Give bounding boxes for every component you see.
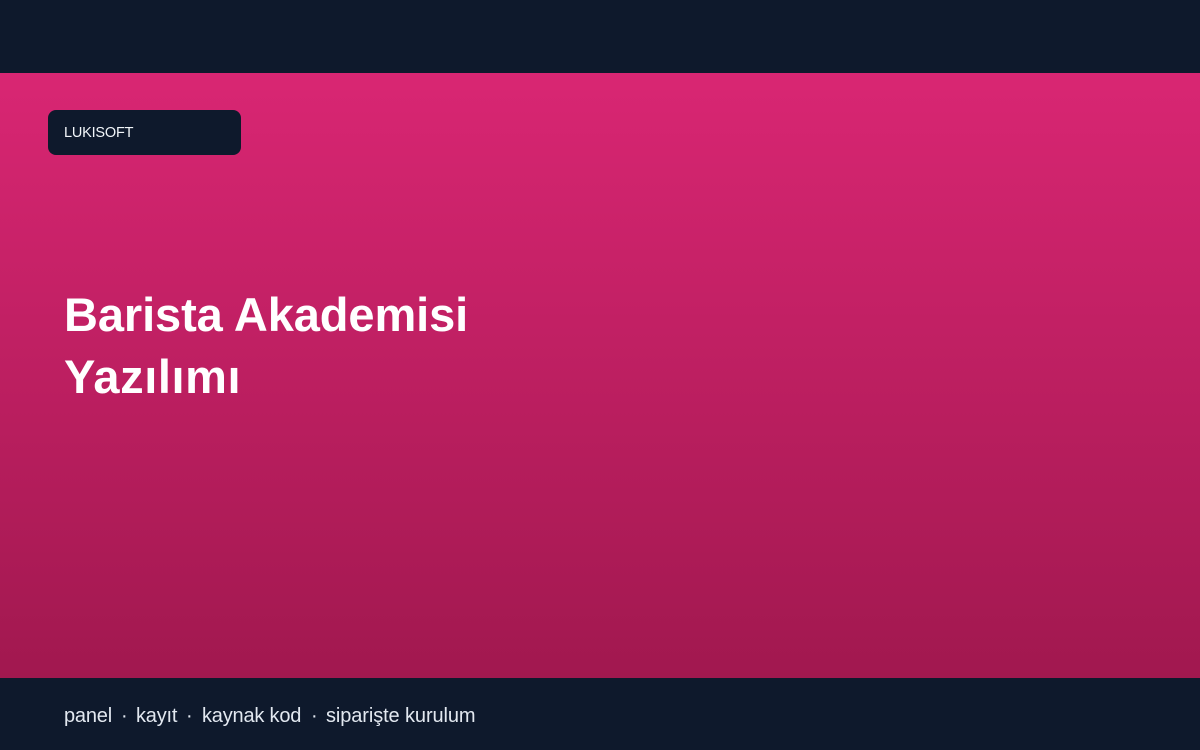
brand name: LUKISOFT xyxy=(64,125,133,141)
link: siparişte kurulum: siparişte kurulum xyxy=(326,705,475,727)
footer links xyxy=(64,705,475,727)
top bar xyxy=(0,0,1200,73)
footer bar xyxy=(0,678,1200,750)
brand badge xyxy=(48,110,241,155)
separator: · xyxy=(121,705,127,727)
link: kayıt: kayıt xyxy=(136,705,177,727)
title xyxy=(64,288,468,403)
title line 2: Yazılımı xyxy=(64,350,241,403)
title line 1: Barista Akademisi xyxy=(64,288,468,341)
separator: · xyxy=(311,705,317,727)
separator: · xyxy=(186,705,192,727)
link: kaynak kod: kaynak kod xyxy=(202,705,301,727)
link: panel: panel xyxy=(64,705,112,727)
